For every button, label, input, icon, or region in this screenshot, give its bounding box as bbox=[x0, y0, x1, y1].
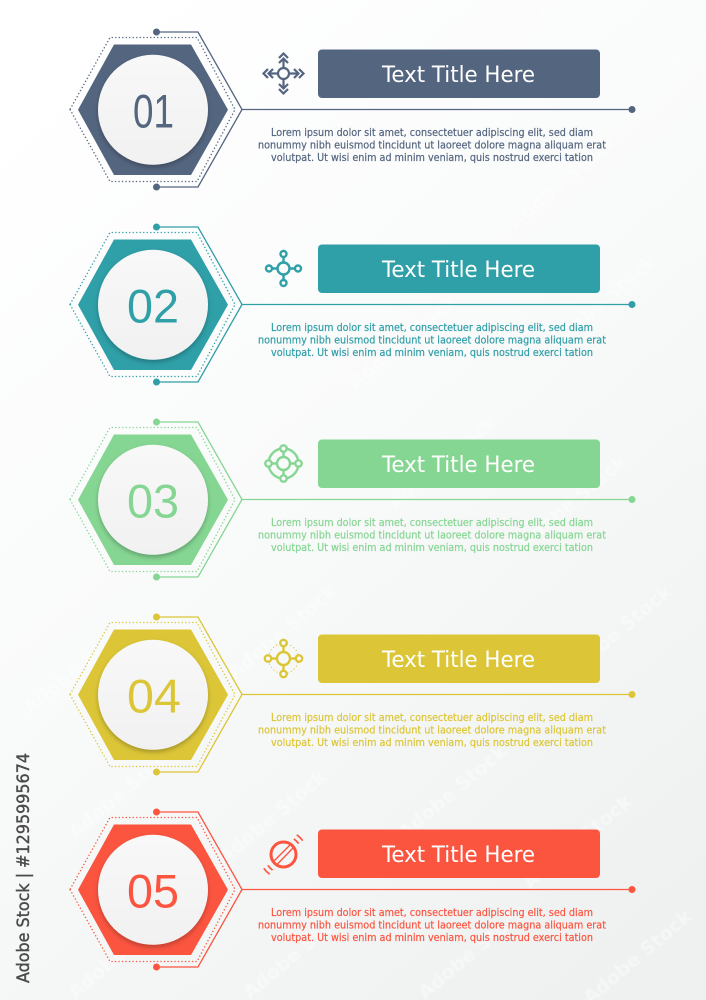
connector dots 05 bbox=[153, 808, 636, 970]
infographic canvas: Adobe Stock bbox=[384, 410, 501, 514]
body text 01: nonummy nibh euismod tincidunt ut laoreet dolore magna aliquam erat bbox=[258, 140, 606, 152]
infographic canvas: Adobe Stock bbox=[39, 80, 156, 184]
number 05: 05 bbox=[127, 864, 179, 918]
connector dots 02 bbox=[153, 224, 636, 386]
body text 01 bbox=[258, 127, 606, 164]
infographic canvas: Adobe Stock bbox=[344, 290, 461, 394]
body text 04: volutpat. Ut wisi enim ad minim veniam, quis nostrud exerci tation bbox=[271, 737, 593, 749]
number 03: 03 bbox=[127, 474, 179, 528]
dotted hexagon outline 01 bbox=[70, 38, 235, 182]
infographic canvas: Adobe Stock bbox=[544, 250, 661, 354]
dotted hexagon outline 02 bbox=[70, 232, 235, 376]
icon: hub with dotted ring bbox=[265, 640, 302, 677]
number 02: 02 bbox=[127, 280, 179, 332]
body text 05 bbox=[258, 907, 606, 944]
title text 04: Text Title Here bbox=[381, 647, 535, 673]
body text 02: nonummy nibh euismod tincidunt ut laoreet dolore magna aliquam erat bbox=[258, 334, 606, 346]
title bar 04 bbox=[318, 634, 600, 683]
infographic canvas: Adobe Stock bbox=[514, 450, 631, 554]
infographic canvas: Adobe Stock bbox=[559, 580, 676, 684]
title bar 02 bbox=[318, 244, 600, 293]
body text 02: Lorem ipsum dolor sit amet, consectetuer adipiscing elit, sed diam bbox=[271, 322, 593, 334]
infographic canvas: Adobe Stock bbox=[504, 130, 621, 234]
connector lines 05 bbox=[156, 812, 632, 967]
panel: step 02 bbox=[70, 224, 636, 386]
body text 02: volutpat. Ut wisi enim ad minim veniam, quis nostrud exerci tation bbox=[271, 347, 593, 359]
icon: ringed hub bbox=[265, 445, 302, 482]
dotted hexagon outline 05 bbox=[70, 818, 235, 962]
title bar 03 bbox=[318, 440, 600, 488]
body text 01: Lorem ipsum dolor sit amet, consectetuer adipiscing elit, sed diam bbox=[271, 127, 593, 139]
infographic canvas: Adobe Stock bbox=[64, 740, 181, 844]
hexagon 04 bbox=[78, 630, 228, 760]
icon: hub with four nodes bbox=[266, 251, 301, 286]
panel: step 04 bbox=[70, 614, 636, 776]
title text 03: Text Title Here bbox=[381, 452, 535, 478]
body text 05: volutpat. Ut wisi enim ad minim veniam, quis nostrud exerci tation bbox=[271, 932, 593, 944]
body text 05: nonummy nibh euismod tincidunt ut laoreet dolore magna aliquam erat bbox=[258, 920, 606, 932]
title text 01: Text Title Here bbox=[381, 62, 535, 88]
title bar 01 bbox=[318, 50, 600, 98]
infographic canvas: Adobe Stock bbox=[9, 280, 126, 384]
number disc 05 bbox=[98, 835, 208, 945]
infographic canvas: Adobe Stock bbox=[394, 740, 511, 844]
connector lines 02 bbox=[156, 227, 632, 382]
hexagon 01 bbox=[78, 44, 228, 175]
body text 03: volutpat. Ut wisi enim ad minim veniam, quis nostrud exerci tation bbox=[271, 542, 593, 554]
number 01: 01 bbox=[133, 84, 174, 138]
body text 03: nonummy nibh euismod tincidunt ut laoreet dolore magna aliquam erat bbox=[258, 530, 606, 542]
watermark credit: Adobe Stock | #1295995674 bbox=[14, 753, 34, 983]
infographic canvas: Adobe Stock bbox=[214, 765, 331, 869]
dotted hexagon outline 04 bbox=[70, 622, 235, 766]
infographic canvas: Adobe Stock bbox=[519, 790, 636, 894]
panel: step 05 bbox=[70, 808, 636, 970]
body text 04: nonummy nibh euismod tincidunt ut laoreet dolore magna aliquam erat bbox=[258, 724, 606, 736]
connector dots 01 bbox=[153, 28, 636, 190]
hexagon 03 bbox=[78, 434, 228, 565]
number 04: 04 bbox=[127, 670, 181, 722]
body text 04 bbox=[258, 712, 606, 749]
panel: step 01 bbox=[70, 28, 636, 190]
body text 05: Lorem ipsum dolor sit amet, consectetuer adipiscing elit, sed diam bbox=[271, 907, 593, 919]
body text 02 bbox=[258, 322, 606, 359]
number disc 03 bbox=[98, 445, 208, 555]
icon: vibrating crossed circle bbox=[264, 835, 303, 874]
body text 01: volutpat. Ut wisi enim ad minim veniam, quis nostrud exerci tation bbox=[271, 152, 593, 164]
infographic canvas: Adobe Stock bbox=[19, 615, 136, 719]
infographic canvas: Adobe Stock bbox=[214, 245, 331, 349]
title text 05: Text Title Here bbox=[381, 842, 535, 868]
hexagon 05 bbox=[78, 824, 228, 955]
number disc 01 bbox=[98, 55, 208, 165]
title text 02: Text Title Here bbox=[381, 257, 535, 283]
body text 03 bbox=[258, 517, 606, 554]
connector lines 01 bbox=[156, 32, 632, 187]
title bar 05 bbox=[318, 830, 600, 878]
number disc 04 bbox=[98, 640, 208, 750]
connector dots 03 bbox=[153, 418, 636, 580]
infographic canvas: Adobe Stock bbox=[374, 90, 491, 194]
dotted hexagon outline 03 bbox=[70, 428, 235, 572]
panel: step 03 bbox=[70, 418, 636, 580]
icon: four-way arrows bbox=[264, 54, 304, 94]
hexagon 02 bbox=[78, 240, 228, 370]
number disc 02 bbox=[98, 250, 208, 360]
connector dots 04 bbox=[153, 614, 636, 776]
infographic canvas: Adobe Stock bbox=[224, 580, 341, 684]
infographic canvas: Adobe Stock bbox=[174, 120, 291, 224]
body text 03: Lorem ipsum dolor sit amet, consectetuer adipiscing elit, sed diam bbox=[271, 517, 593, 529]
body text 04: Lorem ipsum dolor sit amet, consectetuer adipiscing elit, sed diam bbox=[271, 712, 593, 724]
connector lines 03 bbox=[156, 422, 632, 577]
connector lines 04 bbox=[156, 617, 632, 772]
